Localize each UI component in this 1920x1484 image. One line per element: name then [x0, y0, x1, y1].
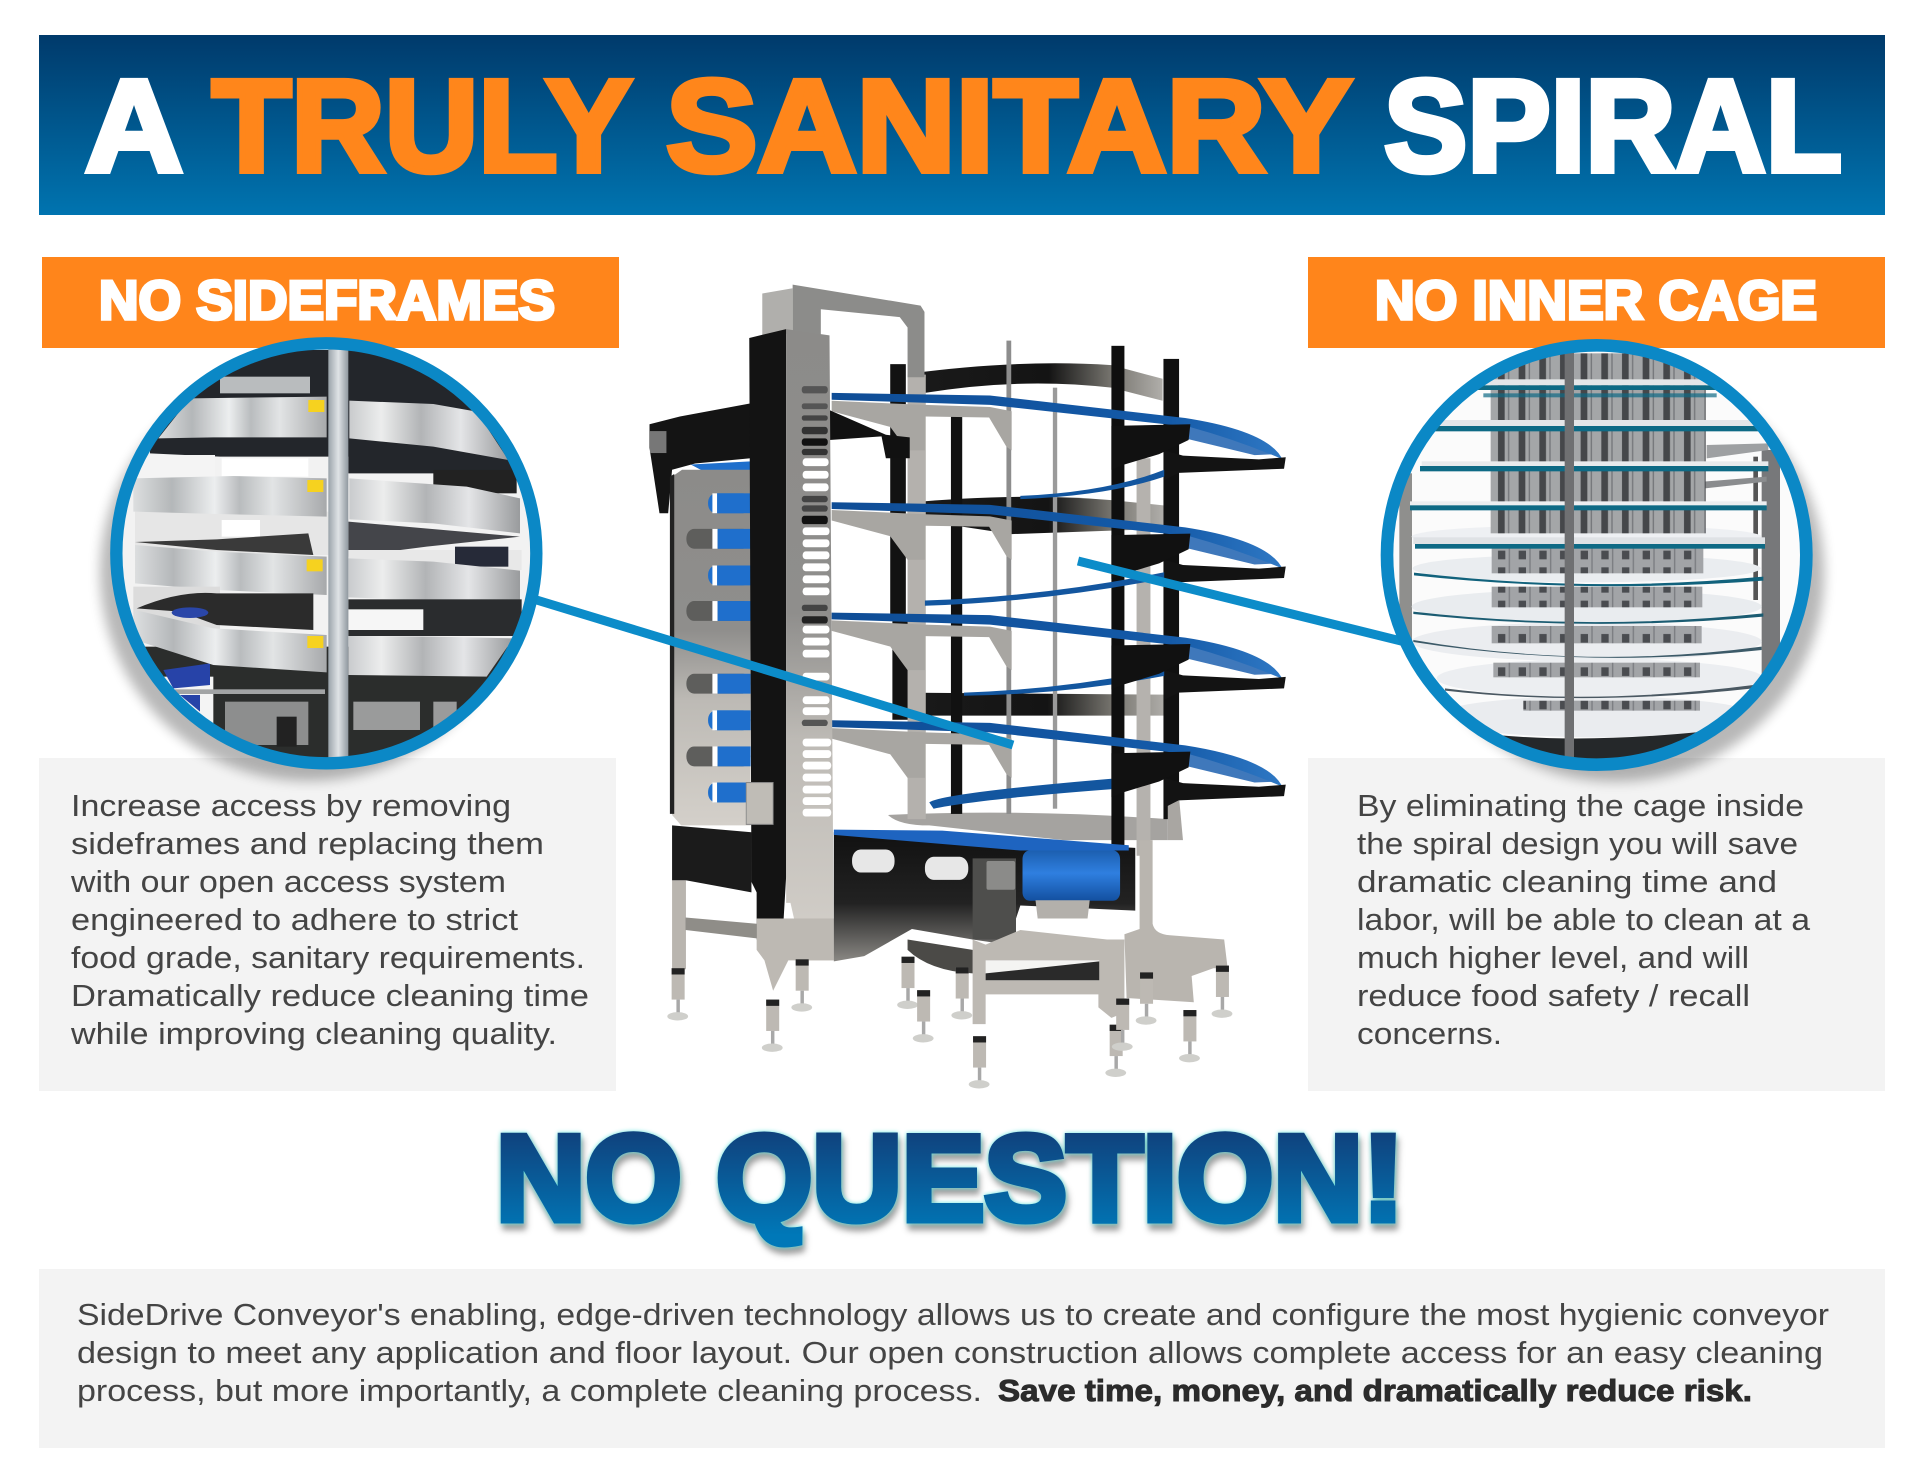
summary text: design to meet any application and floor layout. Our open construction allows complete access for an easy cleaning — [77, 1335, 1823, 1370]
title: A — [85, 52, 183, 199]
circle photo: no inner cage — [1370, 330, 1830, 782]
summary text: SideDrive Conveyor's enabling, edge-driven technology allows us to create and configure the most hygienic conveyor — [77, 1297, 1829, 1332]
central post — [328, 347, 348, 767]
circle photo: open sideframes — [100, 330, 560, 781]
rear deck arcs — [925, 470, 1164, 809]
upper dark structure — [150, 350, 513, 487]
heading: no question: NO QUESTION! — [496, 1110, 1404, 1246]
base frame — [908, 930, 1124, 1024]
band four — [135, 610, 327, 672]
heading: no inner cage — [1308, 257, 1885, 348]
heading: no inner cage: NO INNER CAGE — [1375, 269, 1817, 331]
text block: right description: the spiral design you will save — [1357, 826, 1798, 861]
outer posts — [1399, 473, 1412, 660]
text block: left description — [70, 788, 589, 1051]
band four background — [348, 599, 522, 636]
title: SPIRAL — [1384, 52, 1842, 199]
top portal frame — [793, 285, 924, 377]
illustration: spiral conveyor machine — [650, 285, 1286, 1088]
heading: no sideframes: NO SIDEFRAMES — [99, 269, 555, 331]
rear side plate — [650, 403, 910, 969]
text block: right description: labor, will be able to clean at a — [1357, 902, 1811, 937]
text block: right description: much higher level, and will — [1357, 940, 1749, 975]
text block: left description: sideframes and replacing them — [71, 826, 544, 861]
infeed conveyor — [834, 830, 1135, 961]
summary text: process, but more importantly, a complete cleaning process. — [77, 1373, 982, 1408]
header banner — [39, 35, 1885, 215]
band one — [158, 397, 327, 438]
text block: left description: food grade, sanitary requirements. — [71, 940, 585, 975]
connector: left callout line — [530, 598, 1013, 745]
discs and cylinder segments — [1412, 548, 1763, 737]
text block: left description: Increase access by removing — [71, 788, 511, 823]
band two — [133, 476, 327, 517]
panel: right description background — [1308, 758, 1885, 1091]
deck edges — [1410, 379, 1768, 763]
panel: summary — [39, 1269, 1885, 1448]
text block: left description: with our open access system — [70, 864, 506, 899]
column: black post and slotted plate — [749, 329, 834, 991]
warning labels — [307, 400, 324, 648]
levelling feet — [667, 957, 1232, 1088]
text block: right description: reduce food safety / recall — [1357, 978, 1750, 1013]
title — [85, 52, 1842, 199]
heading: no sideframes — [42, 257, 619, 348]
connector: right callout line — [1078, 561, 1405, 642]
text block: right description: dramatic cleaning time and — [1357, 864, 1777, 899]
back rings and uprights — [888, 341, 1228, 1002]
text block: left description: engineered to adhere to strict — [71, 902, 518, 937]
lower disc 5 — [1412, 527, 1762, 538]
text block: left description: Dramatically reduce cleaning time — [71, 978, 589, 1013]
band three — [348, 550, 522, 570]
mid background — [135, 512, 328, 555]
text block: right description: By eliminating the cage inside — [1357, 788, 1804, 823]
deck levels — [832, 393, 1286, 808]
control box — [746, 783, 773, 824]
summary text: Save time, money, and dramatically reduce risk. — [998, 1373, 1752, 1408]
text block: left description: while improving cleaning quality. — [70, 1016, 557, 1051]
title: TRULY — [212, 52, 632, 199]
inner cylinder — [1491, 353, 1706, 533]
summary text — [77, 1297, 1829, 1408]
text block: right description: concerns. — [1357, 1016, 1502, 1051]
text block: right description — [1357, 788, 1811, 1051]
central post — [1565, 350, 1574, 763]
lower structure — [145, 646, 508, 758]
title: SANITARY — [666, 52, 1352, 199]
portal back panel — [762, 288, 793, 338]
panel: left description background — [39, 758, 616, 1091]
